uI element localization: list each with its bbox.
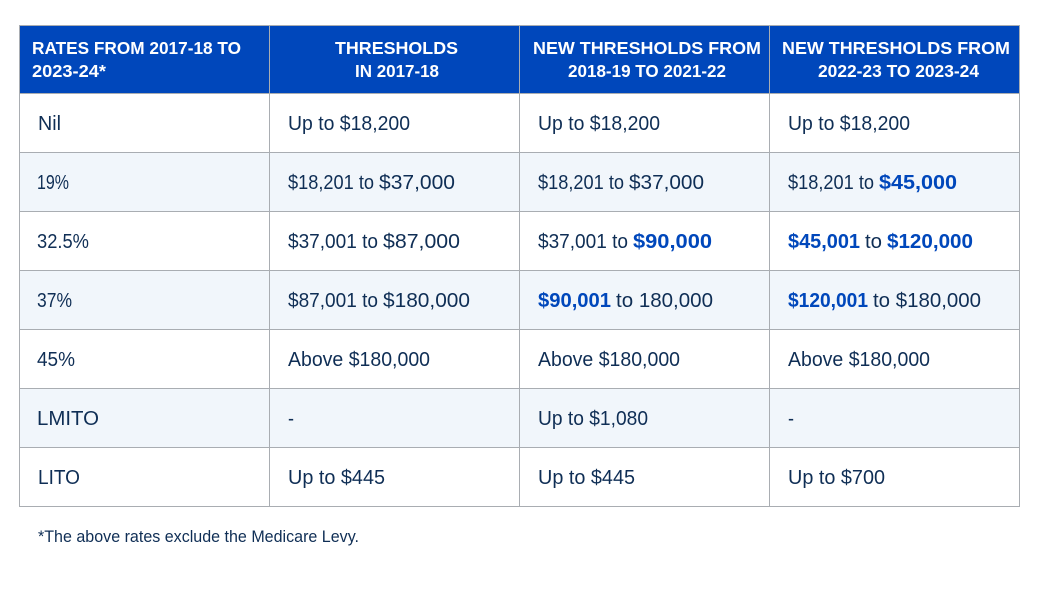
row: 19%: $18,201 to bbox=[288, 172, 374, 194]
row: 37%: 37% bbox=[37, 290, 72, 312]
row: Nil: Up to $18,200 bbox=[788, 113, 910, 135]
row: Nil: Up to $18,200 bbox=[288, 113, 410, 135]
row: Nil: Nil bbox=[38, 113, 61, 135]
row: 19%: $37,000 bbox=[629, 172, 704, 194]
header: rates: 2023-24* bbox=[32, 61, 106, 81]
row: LITO: Up to $445 bbox=[538, 467, 635, 489]
row: 37%: to 180,000 bbox=[616, 290, 713, 312]
row: Nil bbox=[38, 113, 910, 135]
row: Nil: Up to $18,200 bbox=[538, 113, 660, 135]
row: 19% bbox=[37, 172, 957, 194]
row: LITO bbox=[38, 467, 885, 489]
row: 45%: Above $180,000 bbox=[538, 349, 680, 371]
row: 32.5%: 32.5% bbox=[37, 231, 89, 253]
row: LMITO: LMITO bbox=[37, 408, 99, 430]
row: 32.5%: to bbox=[865, 231, 882, 253]
header: new thresholds 2018-19 bbox=[533, 38, 761, 81]
row: 19%: $18,201 to bbox=[788, 172, 874, 194]
row: 37%: to $180,000 bbox=[873, 290, 981, 312]
header: rates bbox=[32, 38, 241, 81]
header: new thresholds 2022-23: NEW THRESHOLDS FROM bbox=[782, 38, 1010, 58]
row: 45%: Above $180,000 bbox=[788, 349, 930, 371]
row: LMITO: Up to $1,080 bbox=[538, 408, 648, 430]
footnote: *The above rates exclude the Medicare Levy. bbox=[38, 528, 359, 546]
row: LITO: Up to $700 bbox=[788, 467, 885, 489]
row: 19%: $37,000 bbox=[379, 172, 455, 194]
table header bbox=[32, 38, 1010, 81]
row: 19%: $18,201 to bbox=[538, 172, 624, 194]
row: LMITO: - bbox=[288, 408, 294, 430]
row: 37%: $180,000 bbox=[383, 290, 470, 312]
row: 19%: $45,000 bbox=[879, 172, 957, 194]
header: rates: RATES FROM 2017-18 TO bbox=[32, 38, 241, 58]
row: 32.5%: $45,001 bbox=[788, 231, 860, 253]
row: 19%: 19% bbox=[37, 172, 69, 194]
row: 32.5%: $37,001 to bbox=[538, 231, 628, 253]
row: 45% bbox=[37, 349, 930, 371]
row: LMITO bbox=[37, 408, 794, 430]
table bbox=[19, 25, 1020, 507]
row: LITO: Up to $445 bbox=[288, 467, 385, 489]
row: 32.5% bbox=[37, 231, 973, 253]
row: 45%: 45% bbox=[37, 349, 75, 371]
row: LITO: LITO bbox=[38, 467, 80, 489]
row: 32.5%: $90,000 bbox=[633, 231, 712, 253]
header: thresholds 2017-18 bbox=[335, 38, 458, 81]
header: new thresholds 2022-23 bbox=[782, 38, 1010, 81]
row: 37%: $120,001 bbox=[788, 290, 868, 312]
row: 32.5%: $120,000 bbox=[887, 231, 973, 253]
row: 37% bbox=[37, 290, 981, 312]
header: new thresholds 2022-23: 2022-23 TO 2023-24 bbox=[818, 61, 979, 81]
row: 32.5%: $37,001 to bbox=[288, 231, 378, 253]
row: 37%: $90,001 bbox=[538, 290, 611, 312]
header: new thresholds 2018-19: 2018-19 TO 2021-22 bbox=[568, 61, 726, 81]
header: new thresholds 2018-19: NEW THRESHOLDS FROM bbox=[533, 38, 761, 58]
row: 45%: Above $180,000 bbox=[288, 349, 430, 371]
alternating row backgrounds bbox=[20, 153, 1019, 447]
row: 32.5%: $87,000 bbox=[383, 231, 460, 253]
row: LMITO: - bbox=[788, 408, 794, 430]
header: thresholds 2017-18: IN 2017-18 bbox=[355, 61, 439, 81]
header row background bbox=[20, 26, 1020, 94]
row: 37%: $87,001 to bbox=[288, 290, 378, 312]
header: thresholds 2017-18: THRESHOLDS bbox=[335, 38, 458, 58]
